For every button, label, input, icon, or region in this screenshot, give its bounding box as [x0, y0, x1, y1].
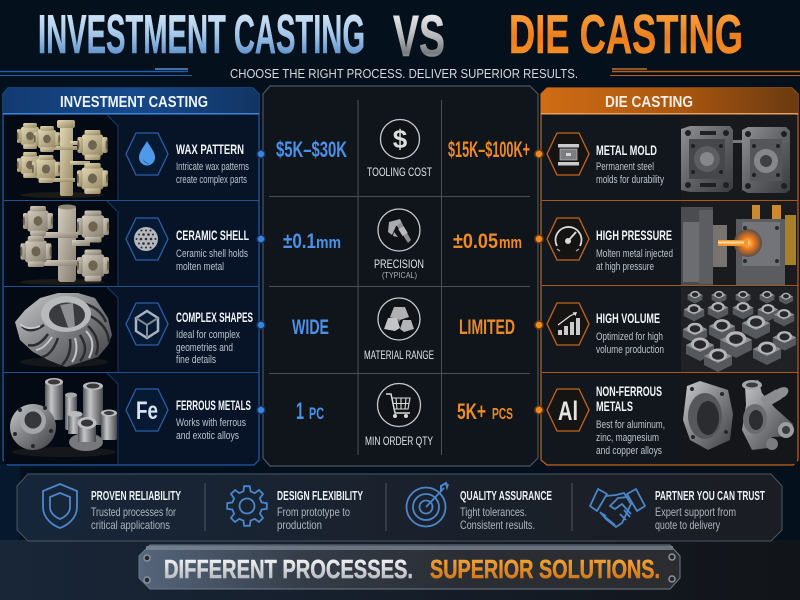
left accent lines	[0, 69, 192, 76]
text: non-ferrous metals: Best for aluminum,	[596, 419, 665, 431]
icon: cube	[126, 303, 168, 345]
text: complex shapes: fine details	[176, 354, 216, 366]
rivets	[144, 554, 675, 583]
image: die press	[681, 201, 797, 285]
banner: different processes superior solutions	[139, 545, 680, 589]
benefit: quality assurance: Tight tolerances.	[460, 505, 527, 519]
icon: dollar: $	[393, 124, 408, 154]
benefit: design flexibility	[227, 486, 363, 532]
text: complex shapes	[176, 309, 253, 366]
row: min order qty: 1	[296, 398, 304, 425]
icon: water drop	[126, 133, 168, 175]
text: non-ferrous metals	[596, 383, 665, 457]
title: INVESTMENT CASTING	[38, 3, 365, 65]
benefit: proven reliability	[43, 484, 181, 532]
row: precision: ±0.05	[453, 230, 498, 253]
panel: benefits strip	[17, 474, 782, 541]
text: ceramic shell: molten metal	[176, 261, 224, 273]
icon: Fe symbol	[126, 389, 168, 431]
benefit: quality assurance: Consistent results.	[460, 518, 535, 532]
row: min order qty: 5K+	[457, 399, 486, 424]
panel: investment casting	[3, 88, 259, 465]
text: non-ferrous metals: zinc, magnesium	[596, 432, 659, 444]
icon: ceramic disc	[126, 218, 168, 260]
text: wax pattern: WAX PATTERN	[176, 141, 244, 157]
row: min order qty: PC	[309, 404, 324, 423]
text: ceramic shell: Ceramic shell holds	[176, 248, 248, 260]
text: ferrous metals	[176, 397, 251, 442]
text: metal mold	[596, 142, 664, 186]
icon: gauge	[547, 218, 589, 260]
icon: Al symbol: Al	[558, 396, 578, 426]
connector dots: orange	[535, 150, 543, 414]
benefit: proven reliability: critical applications	[91, 518, 170, 532]
row: tooling cost: TOOLING COST	[367, 167, 432, 179]
benefit: design flexibility: From prototype to	[277, 505, 350, 519]
image: high volume parts	[681, 287, 797, 372]
benefit: proven reliability: PROVEN RELIABILITY	[91, 488, 181, 503]
text: wax pattern: create complex parts	[176, 174, 247, 186]
header: die casting: DIE CASTING	[605, 94, 693, 111]
banner: different processes superior solutions: DIFFERENT PROCESSES.	[164, 554, 413, 584]
connector dots: blue	[257, 150, 265, 414]
image: impeller	[15, 293, 112, 367]
text: high pressure	[596, 227, 673, 273]
row: material range: MATERIAL RANGE	[364, 350, 434, 362]
benefit: design flexibility: production	[277, 518, 322, 532]
icon: growth chart	[547, 303, 589, 345]
icon: handshake	[590, 489, 645, 527]
text: metal mold: METAL MOLD	[596, 142, 657, 158]
icon: shield	[43, 484, 77, 528]
icon: cart	[378, 384, 420, 426]
benefit: quality assurance: QUALITY ASSURANCE	[460, 488, 552, 503]
text: high pressure: Molten metal injected	[596, 248, 673, 260]
row: tooling cost: $15K–$100K+	[448, 137, 530, 162]
title: VS	[393, 4, 445, 69]
icon: target	[406, 483, 448, 526]
text: metal mold: molds for durability	[596, 174, 664, 186]
panel: comparison	[263, 86, 538, 466]
row: tooling cost: $5K–$30K	[276, 137, 347, 162]
image: ceramic shell	[20, 204, 109, 285]
row: material range: WIDE	[292, 316, 329, 339]
row: precision: ±0.1	[283, 230, 316, 253]
text: ferrous metals: FERROUS METALS	[176, 397, 251, 413]
row: precision: (TYPICAL)	[382, 270, 417, 280]
row: material range	[292, 298, 515, 362]
text: high volume	[596, 310, 664, 356]
header: investment casting: INVESTMENT CASTING	[60, 94, 208, 111]
row: precision: mm	[499, 233, 522, 252]
icon: gear	[227, 486, 267, 526]
row: min order qty	[296, 384, 513, 448]
text: non-ferrous metals: and copper alloys	[596, 445, 662, 457]
text: high volume: HIGH VOLUME	[596, 310, 660, 326]
subtitle: CHOOSE THE RIGHT PROCESS. DELIVER SUPERIOR RESULTS.	[230, 67, 578, 81]
icon: Al symbol	[547, 389, 589, 431]
row: min order qty: MIN ORDER QTY	[365, 436, 433, 448]
text: ceramic shell: CERAMIC SHELL	[176, 227, 249, 243]
benefit: partner you can trust: quote to delivery	[655, 518, 720, 532]
row: precision: mm	[316, 233, 341, 252]
text: non-ferrous metals: METALS	[596, 398, 633, 414]
text: wax pattern: Intricate wax patterns	[176, 161, 249, 173]
row: precision	[283, 209, 522, 280]
icon: caliper	[378, 209, 420, 251]
benefit: proven reliability: Trusted processes for	[91, 505, 176, 519]
text: non-ferrous metals: NON-FERROUS	[596, 383, 662, 399]
image: wax pattern	[17, 120, 108, 198]
text: high pressure: HIGH PRESSURE	[596, 227, 672, 243]
text: metal mold: Permanent steel	[596, 161, 654, 173]
text: ceramic shell	[176, 227, 249, 273]
right accent lines	[610, 69, 800, 76]
header: die casting	[541, 88, 798, 114]
benefit: partner you can trust: Expert support from	[655, 505, 736, 519]
benefit: partner you can trust	[590, 488, 765, 532]
panel: die casting	[541, 88, 798, 465]
text: high volume: Optimized for high	[596, 331, 663, 343]
icon: dollar	[380, 120, 420, 158]
text: ferrous metals: and exotic alloys	[176, 430, 239, 442]
text: complex shapes: geometries and	[176, 342, 233, 354]
text: high pressure: at high pressure	[596, 261, 654, 273]
icon: mold	[547, 133, 589, 175]
row: material range: LIMITED	[459, 316, 515, 339]
banner: different processes superior solutions: SUPERIOR SOLUTIONS.	[430, 554, 660, 584]
image: metal molds	[681, 115, 797, 200]
text: wax pattern	[176, 141, 249, 186]
text: complex shapes: COMPLEX SHAPES	[176, 309, 253, 325]
text: complex shapes: Ideal for complex	[176, 329, 240, 341]
benefit: quality assurance	[406, 483, 552, 532]
image: ferrous parts	[10, 378, 117, 457]
row: tooling cost	[276, 120, 530, 179]
icon: Fe symbol: Fe	[136, 397, 158, 425]
row: precision: PRECISION	[374, 259, 424, 271]
icon: ingots	[378, 298, 420, 340]
text: ferrous metals: Works with ferrous	[176, 417, 246, 429]
image: non-ferrous housings	[681, 373, 797, 464]
benefit: design flexibility: DESIGN FLEXIBILITY	[277, 488, 363, 503]
text: high volume: volume production	[596, 344, 664, 356]
header: investment casting	[3, 88, 259, 114]
row: min order qty: PCS	[492, 406, 513, 423]
